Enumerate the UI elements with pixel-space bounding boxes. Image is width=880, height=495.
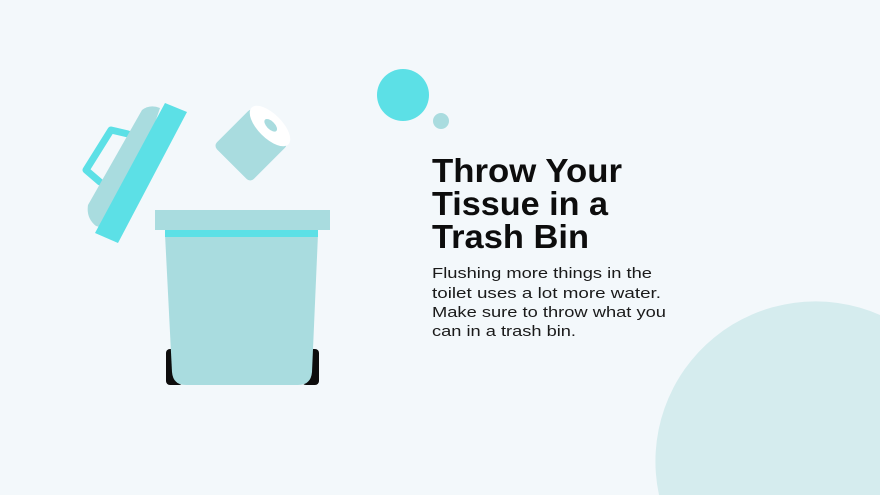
title: Tissue in a: [432, 185, 609, 222]
body text: can in a trash bin.: [432, 323, 576, 340]
icon: trash bin: [155, 210, 330, 385]
lid front bar: [95, 103, 187, 243]
bin cyan band: [165, 230, 318, 237]
title: [432, 152, 622, 255]
bin wheels: [166, 349, 319, 385]
decorative circle large: [655, 301, 880, 495]
bin body: [165, 234, 318, 385]
icon: bin lid: [86, 103, 187, 243]
decorative circle cyan: [377, 69, 429, 121]
lid back: [88, 106, 160, 232]
body text: [432, 265, 666, 340]
lid handle: [86, 130, 128, 182]
icon: toilet paper roll: [213, 99, 297, 183]
title: Trash Bin: [432, 218, 589, 255]
body text: Make sure to throw what you: [432, 304, 666, 321]
body text: Flushing more things in the: [432, 265, 652, 282]
decorative circle small: [433, 113, 449, 129]
body text: toilet uses a lot more water.: [432, 285, 661, 302]
title: Throw Your: [432, 152, 622, 189]
bin rim: [155, 210, 330, 230]
